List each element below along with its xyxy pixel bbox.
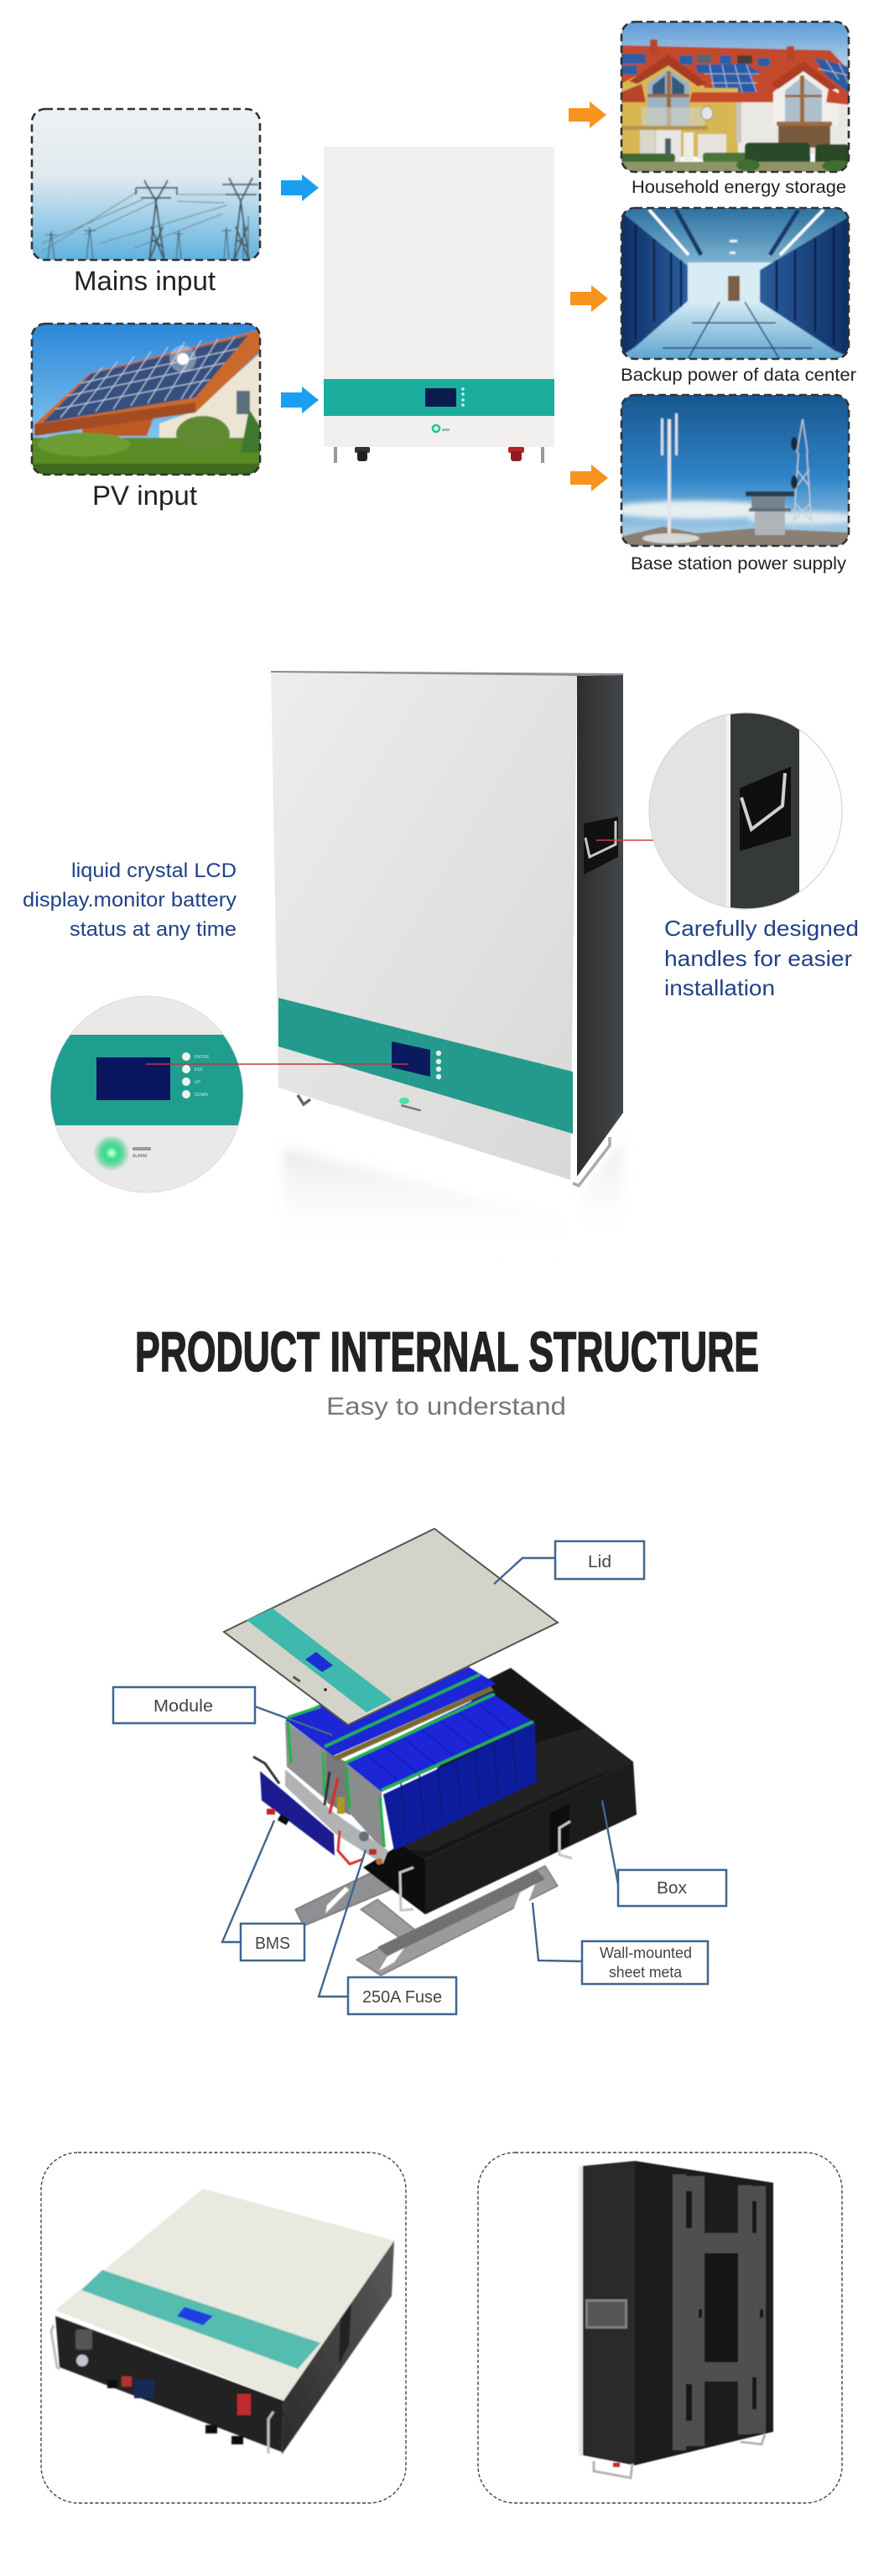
label: Lid (555, 1541, 644, 1579)
panel: energy flow (31, 21, 864, 574)
floor reflection (283, 1142, 622, 1258)
dashed frame (478, 2153, 842, 2503)
text: handles note: Carefully designed (664, 916, 859, 941)
BMS board and fuse wiring (253, 1757, 388, 1865)
teal strip (247, 1608, 392, 1712)
label: household: Household energy storage (632, 178, 846, 197)
label: BMS: BMS (255, 1935, 290, 1953)
label: wall-mounted sheet meta (582, 1941, 708, 1984)
teal band (81, 2270, 320, 2369)
magnifier: LCD detail: UP (195, 1080, 201, 1085)
handle (584, 817, 618, 875)
front logo (399, 1098, 421, 1112)
battery front view (324, 147, 554, 463)
arrow: to household (569, 101, 606, 128)
callout line: LCD (146, 1063, 408, 1065)
lid (224, 1529, 558, 1725)
callout line: handle (596, 839, 688, 841)
label: 250A Fuse (348, 1977, 456, 2014)
label: BMS (241, 1924, 304, 1961)
label: Box: Box (657, 1879, 687, 1898)
photo: PV input solar roof (31, 323, 261, 476)
label: Module (113, 1687, 255, 1723)
logo (433, 425, 450, 432)
wall bracket (673, 2174, 766, 2450)
LCD screen (425, 388, 456, 407)
panel: top view of battery (41, 2153, 406, 2503)
feet and terminals (334, 447, 544, 463)
magnifier: LCD detail: ESC (195, 1067, 204, 1072)
bottom handle (573, 1137, 610, 1186)
text: LCD note: liquid crystal LCD (71, 860, 237, 882)
LCD (177, 2307, 213, 2325)
handles and terminals (51, 2325, 273, 2454)
magnifier: handle detail (646, 709, 847, 914)
leader lines (222, 1558, 618, 1997)
wall-mounted brackets (295, 1866, 558, 1976)
magnifier: LCD detail (46, 994, 247, 1195)
magnifier: LCD detail: DOWN (195, 1093, 208, 1098)
front battery module (344, 1692, 537, 1851)
arrow: mains to battery (281, 174, 319, 201)
battery body, lying flat (51, 2189, 394, 2454)
label: Lid: Lid (588, 1553, 611, 1571)
text: LCD note: status at any time (70, 918, 237, 941)
photo: data center corridor (621, 207, 850, 360)
teal band (278, 998, 573, 1134)
photo: household with solar roof (621, 21, 852, 172)
label: 250A Fuse: 250A Fuse (362, 1988, 442, 2007)
lid LCD (305, 1652, 333, 1672)
label: wall-mounted sheet meta: sheet meta (609, 1964, 683, 1981)
panel: rear view of battery (478, 2153, 842, 2503)
label: Box (618, 1870, 726, 1906)
label: data center: Backup power of data center (621, 366, 856, 385)
back battery module (285, 1650, 496, 1815)
side handle recess (585, 2299, 627, 2329)
teal band (324, 379, 554, 416)
label: mains input: Mains input (74, 266, 216, 296)
label: PV input: PV input (92, 480, 197, 511)
arrow: to data center (570, 285, 608, 312)
text: handles note (664, 916, 859, 1000)
label: wall-mounted sheet meta: Wall-mounted (600, 1945, 692, 1961)
LCD (392, 1041, 430, 1077)
panel: exploded diagram (113, 1529, 726, 2014)
magnifier: LCD detail: ALARM (133, 1154, 147, 1159)
arrow: PV to battery (281, 387, 319, 413)
subtitle: Easy to understand (326, 1393, 566, 1420)
battery rear body (579, 2161, 773, 2478)
magnifier: LCD detail: ENTER (195, 1055, 209, 1060)
arrow: to base station (570, 465, 608, 491)
text: handles note: handles for easier (664, 946, 852, 971)
photo: base station tower (621, 394, 850, 547)
panel: battery features (23, 671, 857, 1192)
black box enclosure (363, 1668, 637, 1914)
label: base station: Base station power supply (631, 554, 847, 574)
dashed frame (41, 2153, 406, 2503)
text: LCD note (23, 860, 237, 941)
photo: mains input power towers (31, 108, 261, 261)
text: LCD note: display.monitor battery (23, 889, 237, 911)
battery perspective view (271, 671, 623, 1186)
feet (594, 2461, 632, 2478)
text: handles note: installation (664, 975, 775, 1000)
label: Module: Module (153, 1697, 213, 1716)
